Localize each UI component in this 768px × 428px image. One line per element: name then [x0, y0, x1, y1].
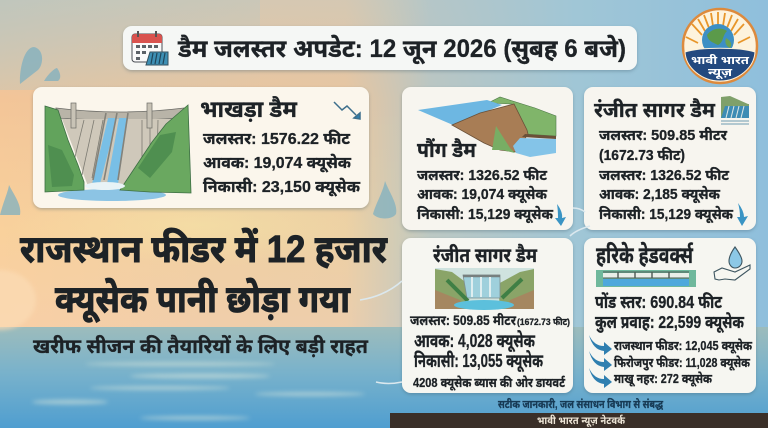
logo: Bhavi Bharat News: भावी भारत: [691, 54, 749, 67]
data lines: निकासी: 15,129 क्यूसेक: [417, 205, 554, 224]
feeder list with arrows: [589, 335, 752, 388]
data lines: पोंड स्तर: 690.84 फीट: [595, 292, 722, 312]
heading: हरिके हेडवर्क्स: [596, 242, 694, 268]
data lines: आवक: 19,074 क्यूसेक: [417, 185, 548, 204]
data lines: (1672.73 फीट): [517, 316, 570, 328]
logo: Bhavi Bharat News: [683, 9, 757, 83]
illustration: Bhakra dam: [45, 103, 191, 201]
connector streams between panels: [360, 208, 590, 384]
data lines: निकासी: 13,055 क्यूसेक: [414, 351, 544, 373]
title: डैम जलस्तर अपडेट: 12 जून 2026 (सुबह 6 बजे): [177, 34, 626, 65]
illustration: dam: [435, 268, 534, 310]
data lines: जलस्तर: 1326.52 फीट: [417, 167, 547, 184]
data lines: [417, 167, 554, 224]
logo: Bhavi Bharat News: न्यूज़: [708, 67, 732, 80]
panel: Ranjit Sagar Dam (bottom): [402, 238, 573, 393]
illustration: Pong dam: [418, 97, 556, 157]
water drops: [0, 47, 396, 218]
heading: भाखड़ा डैम: [200, 96, 298, 123]
data lines: आवक: 4,028 क्यूसेक: [414, 331, 536, 353]
data lines: जलस्तर: 509.85 मीटर: [599, 127, 728, 144]
icon: small dam: [721, 96, 749, 124]
footer bar: भावी भारत न्यूज़ नेटवर्क: [537, 413, 625, 428]
headline: [20, 227, 388, 358]
panel: Harike Headworks: [584, 238, 756, 393]
footer note: सटीक जानकारी, जल संसाधन विभाग से संबद्ध: [498, 397, 663, 411]
data lines: [599, 127, 734, 224]
panel: Ranjit Sagar Dam (top): [584, 87, 756, 230]
data lines: [203, 129, 361, 197]
feeder list with arrows: माखू नहर: 272 क्यूसेक: [614, 371, 712, 387]
heading: पौंग डैम: [417, 138, 476, 162]
data lines: जलस्तर: 1326.52 फीट: [599, 167, 729, 184]
heading: रंजीत सागर डैम: [433, 243, 538, 267]
icon: down arrow: [555, 204, 566, 226]
data lines: 4208 क्यूसेक ब्यास की ओर डायवर्ट: [413, 375, 566, 391]
data lines: आवक: 19,074 क्यूसेक: [203, 153, 352, 173]
data lines: निकासी: 15,129 क्यूसेक: [599, 205, 734, 224]
panel: Bhakra Dam: [33, 87, 369, 208]
icon: down arrow: [737, 203, 748, 226]
data lines: निकासी: 23,150 क्यूसेक: [203, 177, 361, 197]
icon: hand with water drop: [714, 247, 750, 280]
illustration: barrage: [596, 270, 696, 287]
data lines: आवक: 2,185 क्यूसेक: [599, 185, 721, 204]
heading: रंजीत सागर डैम: [594, 98, 715, 122]
data lines: जलस्तर: 509.85 मीटर: [410, 312, 517, 328]
headline: क्यूसेक पानी छोड़ा गया: [55, 277, 351, 323]
panel: Pong Dam: [402, 87, 573, 230]
headline: राजस्थान फीडर में 12 हजार: [20, 227, 388, 271]
data lines: (1672.73 फीट): [599, 147, 685, 164]
data lines: [410, 312, 570, 391]
header pill: [123, 26, 637, 70]
icon: calendar with dam: [132, 31, 168, 65]
icon: falling trend arrow: [334, 102, 360, 119]
footer bar: [390, 413, 768, 428]
subheading: खरीफ सीजन की तैयारियों के लिए बड़ी राहत: [33, 334, 369, 358]
data lines: [595, 292, 744, 334]
data lines: जलस्तर: 1576.22 फीट: [203, 129, 350, 148]
